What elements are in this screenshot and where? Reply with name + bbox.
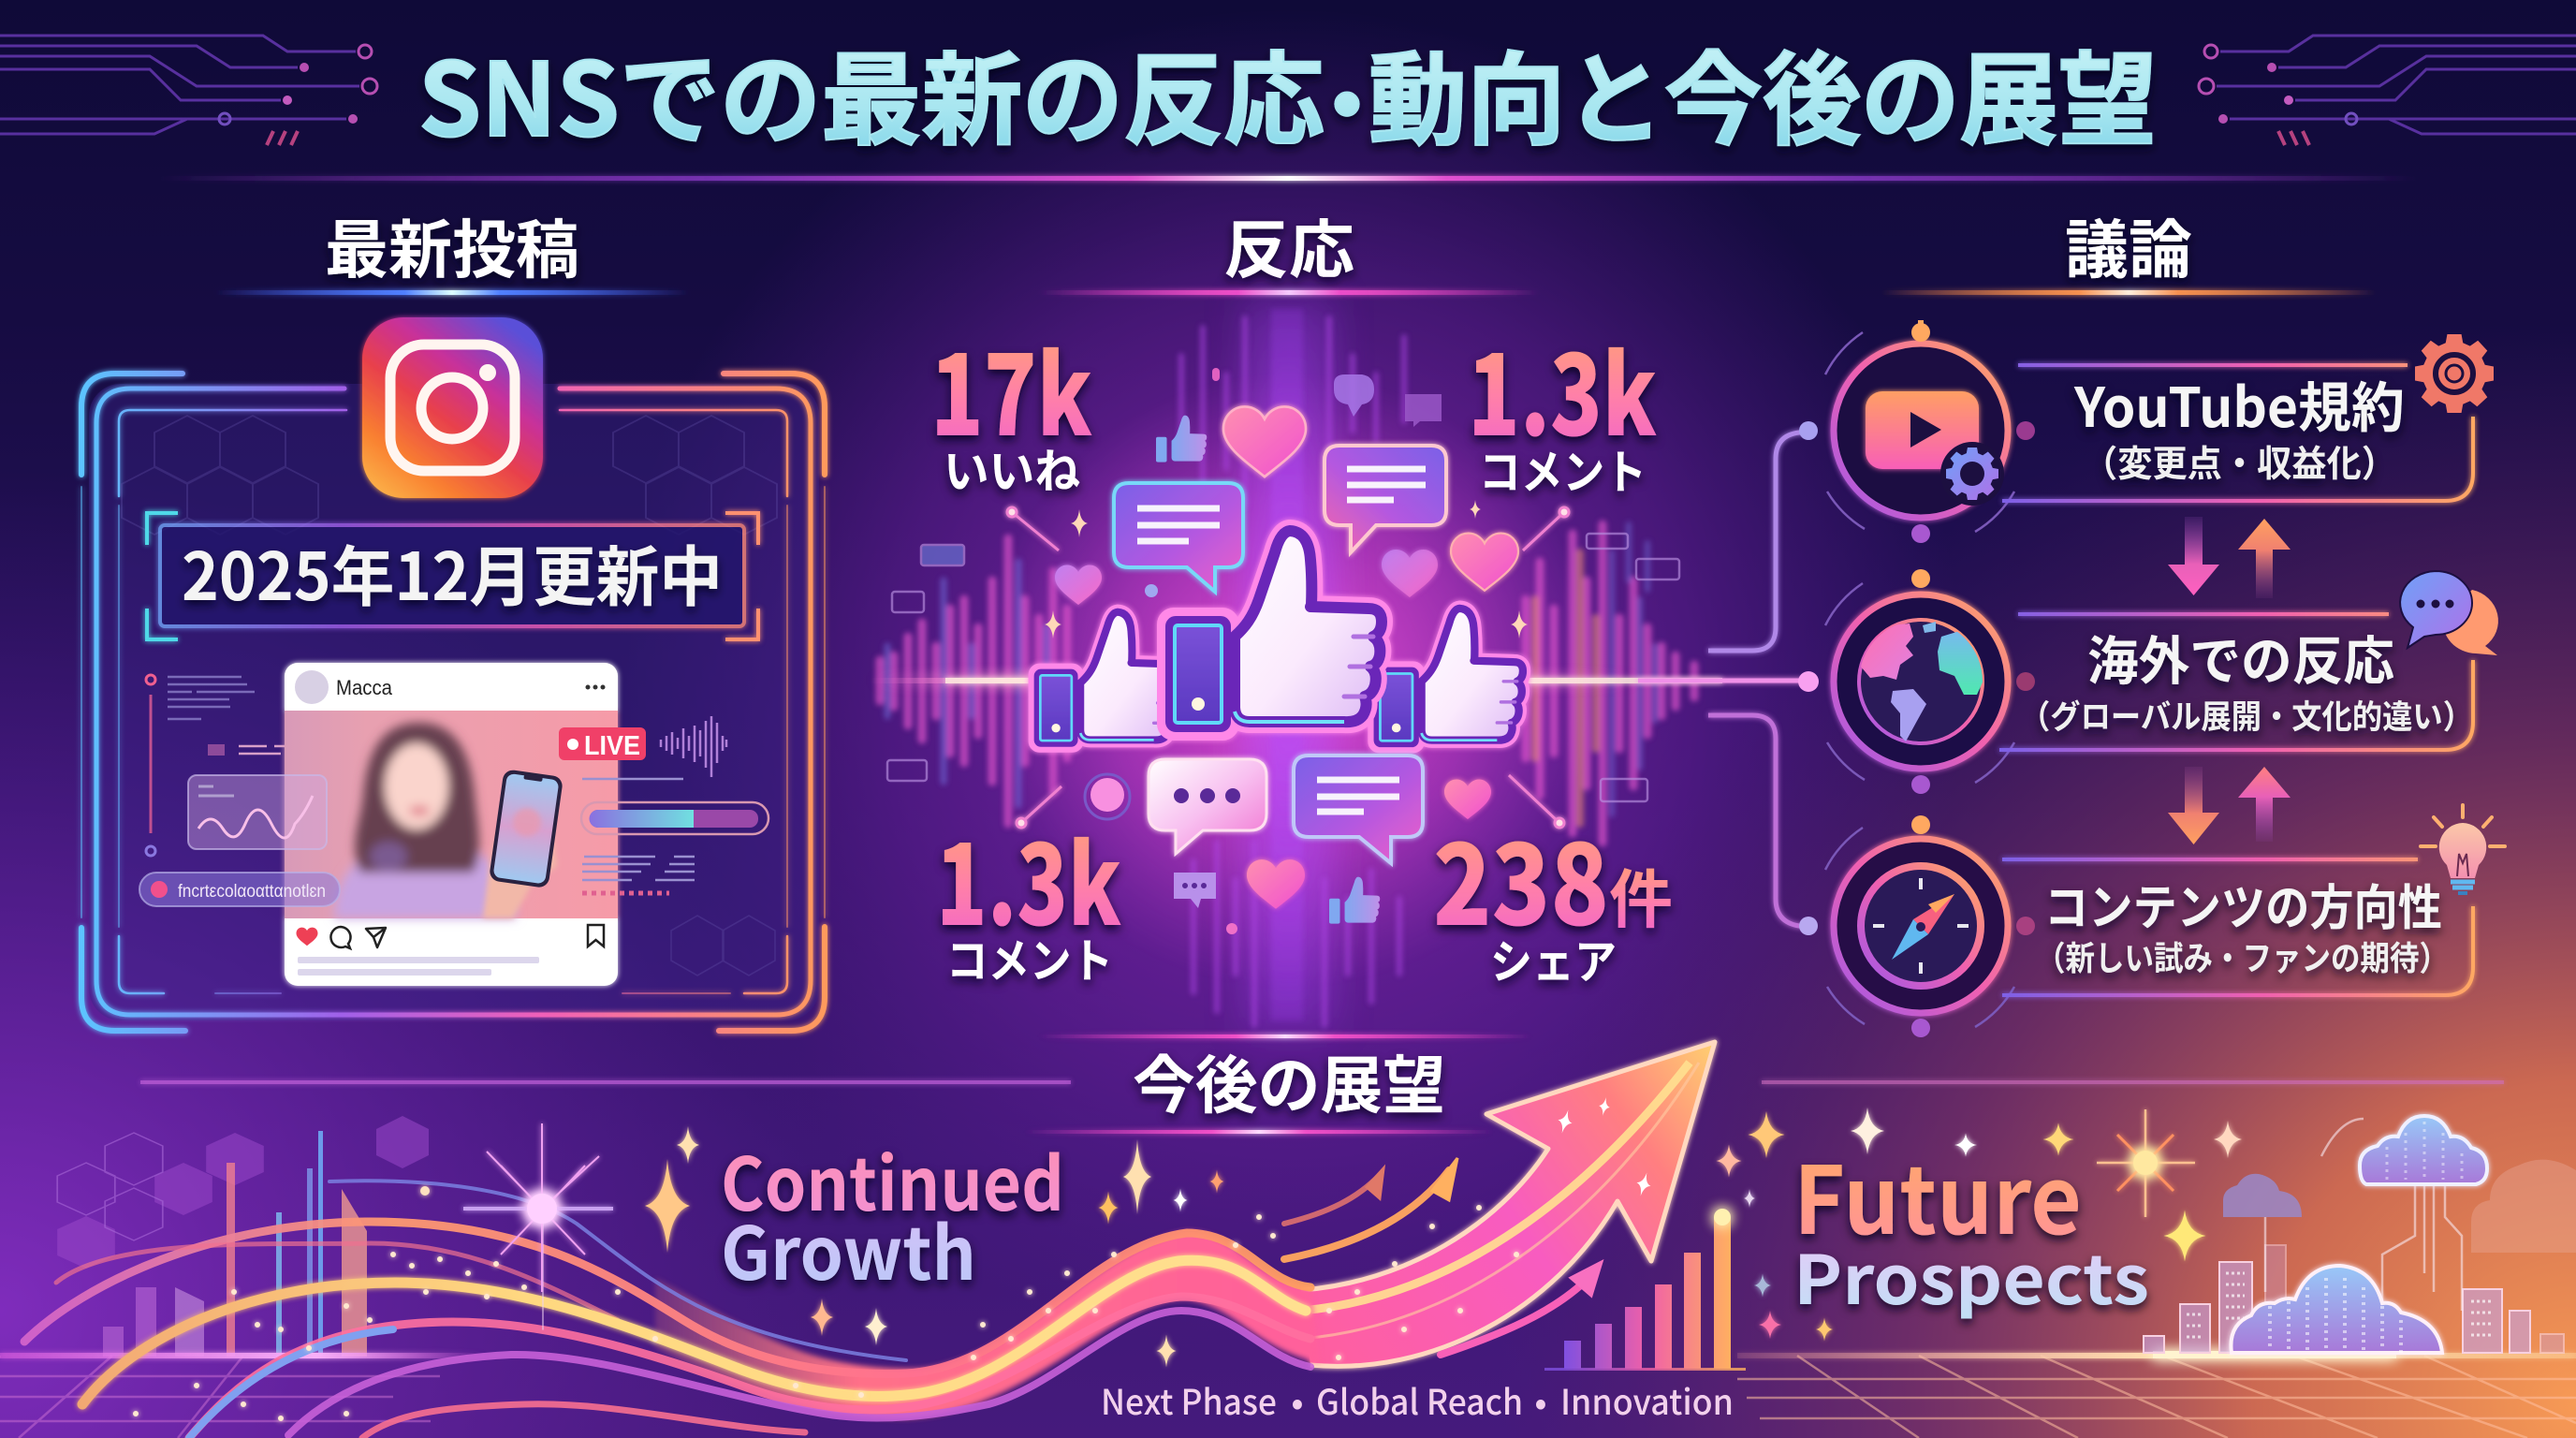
heading: 議論: 議論: [2065, 198, 2192, 291]
pill label: [139, 873, 340, 906]
icon: small stickers: [1085, 368, 1442, 934]
icon: speech bubble top left: [1114, 483, 1243, 592]
hand: [483, 829, 557, 918]
icon: ring: [1799, 815, 2035, 1037]
arrow down: [2168, 517, 2219, 595]
waveform: [661, 716, 726, 777]
panel tint: [89, 384, 819, 1020]
decoration: sparkles: [645, 1108, 2242, 1367]
post header: Macca: [336, 676, 393, 699]
progress bar: [581, 802, 768, 834]
icon: speech bubble bottom right: [1294, 756, 1423, 863]
text: Future Prospects: Future: [1793, 1125, 2082, 1261]
circuit lines: [2265, 1119, 2462, 1329]
frame lines: [2002, 859, 2473, 995]
sublabel: （新しい試み・ファンの期待）: [2036, 932, 2449, 980]
stat: 238件 シェア: 件: [1609, 848, 1673, 941]
connectors to discussion: [1638, 433, 1808, 926]
icon: pin circle: [1085, 774, 1130, 819]
frame lines: [1999, 614, 2473, 750]
sublabel: （変更点・収益化）: [2083, 435, 2396, 488]
arrow up: [2238, 519, 2291, 598]
cloud medium left: [2223, 1174, 2302, 1217]
label: 海外での反応: [2087, 620, 2394, 696]
heading lines: [140, 1034, 2504, 1134]
icon: chat bubbles: [2400, 571, 2498, 655]
heading: 最新投稿: 最新投稿: [325, 198, 579, 291]
decoration: particles: [136, 1208, 1516, 1418]
arrows between items: [2168, 517, 2291, 598]
stat: 1.3k コメント bottom: コメント: [946, 924, 1113, 991]
neon frame: [81, 374, 825, 1031]
stat: 238件 シェア: [1433, 797, 1673, 992]
icon: speech bubble top right: [1325, 446, 1446, 552]
big upward arrow: [1301, 1042, 1715, 1366]
stat: 17k いいね: [930, 307, 1092, 502]
stat: 17k いいね: 17k: [930, 307, 1092, 467]
waves: [24, 1181, 1320, 1438]
text: tagline: Global Reach: [1316, 1374, 1523, 1425]
heading: 反応: [1039, 198, 1539, 295]
text: tagline: Next Phase: [1101, 1374, 1277, 1425]
date text: 2025年12月更新中: [182, 525, 723, 620]
illustration: cloud city: [2144, 1116, 2576, 1353]
phone in hand: [489, 769, 564, 888]
chart: reactions: [871, 300, 1722, 1030]
text: tagline: •: [1534, 1374, 1547, 1425]
cloud top: [2360, 1116, 2487, 1184]
decoration: hexagon network: [122, 416, 777, 976]
text: Future Prospects: Prospects: [1793, 1225, 2149, 1324]
icon: small gear: [1940, 442, 2004, 506]
heading: 最新投稿: [215, 198, 689, 295]
stat: 238件 シェア: 238: [1433, 797, 1609, 957]
icon: small bubble bottom: [1174, 873, 1216, 908]
text: Continued Growth: [721, 1127, 1064, 1301]
date box: [147, 513, 758, 639]
arrow down: [2168, 767, 2219, 844]
stat: 1.3k コメント top: [1468, 307, 1657, 503]
stat: 17k いいね: いいね: [944, 434, 1080, 502]
decoration: perspective grid: [0, 1351, 2576, 1438]
title divider: [159, 176, 2417, 181]
icon: star burst: [2097, 1109, 2195, 1217]
decoration: left data lines: [146, 675, 339, 856]
text: tagline: Innovation: [1560, 1374, 1734, 1425]
stat: 1.3k コメント bottom: [936, 797, 1121, 991]
icon: small bubble top right: [1405, 394, 1442, 427]
connector rays: [1007, 507, 1569, 828]
cloud front: [2231, 1266, 2442, 1353]
small data tags: [887, 534, 1679, 801]
icon: light bulb: [2421, 805, 2505, 893]
blurred woman: [334, 723, 517, 918]
title: 動向と今後の展望: [1368, 20, 2157, 166]
post action icons: [296, 925, 604, 976]
icon: small bubble top left: [1334, 374, 1374, 417]
title: SNSでの最新の反応: [418, 20, 1325, 166]
live badge: [559, 727, 646, 761]
hearts: [1055, 406, 1518, 909]
icon: compass: [1861, 866, 1981, 986]
decoration: circuit lines top left: [0, 36, 377, 145]
label: YouTube規約: [2073, 364, 2405, 443]
icon: globe: [1859, 620, 1986, 743]
icon: ring: [1799, 320, 2035, 543]
icon: spark burst: [420, 1123, 613, 1292]
chart glass box: [188, 775, 327, 849]
decoration: circuit lines top right: [2199, 36, 2576, 145]
icon: orange gear: [2415, 334, 2494, 413]
stat: 1.3k コメント top: コメント: [1479, 435, 1647, 503]
stat: 238件 シェア: シェア: [1490, 925, 1617, 992]
heading: 議論: [1881, 198, 2376, 295]
post card: [285, 663, 618, 986]
buildings: [2144, 1245, 2564, 1353]
icon: speech bubble dots: [1149, 759, 1266, 854]
sublabel: （グローバル展開・文化的違い）: [2020, 691, 2473, 739]
bar chart: [1544, 1209, 1746, 1371]
icon: instagram logo: [362, 317, 543, 498]
panel: discussion: [1798, 320, 2505, 1037]
section: future outlook: [0, 1034, 2576, 1438]
text: tagline: [1101, 1374, 1734, 1425]
text: Continued Growth: Growth: [721, 1196, 976, 1301]
title: [418, 20, 2157, 166]
arrow up: [2238, 767, 2291, 842]
sound wave bars: [871, 300, 1722, 1030]
heading: 反応: 反応: [1223, 198, 1354, 291]
frame lines: [2002, 365, 2473, 501]
ribbon fill: [655, 1231, 1320, 1418]
text: tagline: •: [1291, 1374, 1304, 1425]
icon: youtube play: [1866, 391, 1979, 469]
panel: latest post: [81, 317, 825, 1031]
text: Future Prospects: [1793, 1125, 2149, 1324]
text: Continued Growth: Continued: [721, 1127, 1064, 1232]
pill label: fncrtεcolαoαttαnotlɛn: [178, 882, 326, 902]
item: 海外での反応: [1798, 569, 2498, 794]
post header: [295, 670, 603, 704]
item: コンテンツの方向性: [1799, 805, 2505, 1037]
stat: 1.3k コメント top: 1.3k: [1468, 307, 1657, 467]
title: ・: [1305, 38, 1389, 160]
decoration: hexagons and bars left: [57, 1116, 429, 1357]
icon: small thumb top: [1156, 416, 1207, 462]
faint cloud right: [2471, 1160, 2576, 1253]
item: YouTube規約: [1799, 320, 2494, 543]
decoration: right data lines: [582, 779, 695, 880]
arrows between items: [2168, 767, 2291, 844]
label: コンテンツの方向性: [2044, 869, 2442, 939]
post photo: [285, 711, 618, 918]
icon: small thumb bottom: [1329, 877, 1380, 924]
small sparkles: [1045, 500, 1528, 638]
small growth arrows: [1284, 1158, 1602, 1355]
live badge: LIVE: [584, 731, 640, 761]
icons: thumbs up: [1036, 531, 1523, 745]
icon: ring: [1798, 569, 2035, 794]
stat: 1.3k コメント bottom: 1.3k: [936, 797, 1121, 957]
heading: 今後の展望: 今後の展望: [1133, 1035, 1445, 1126]
